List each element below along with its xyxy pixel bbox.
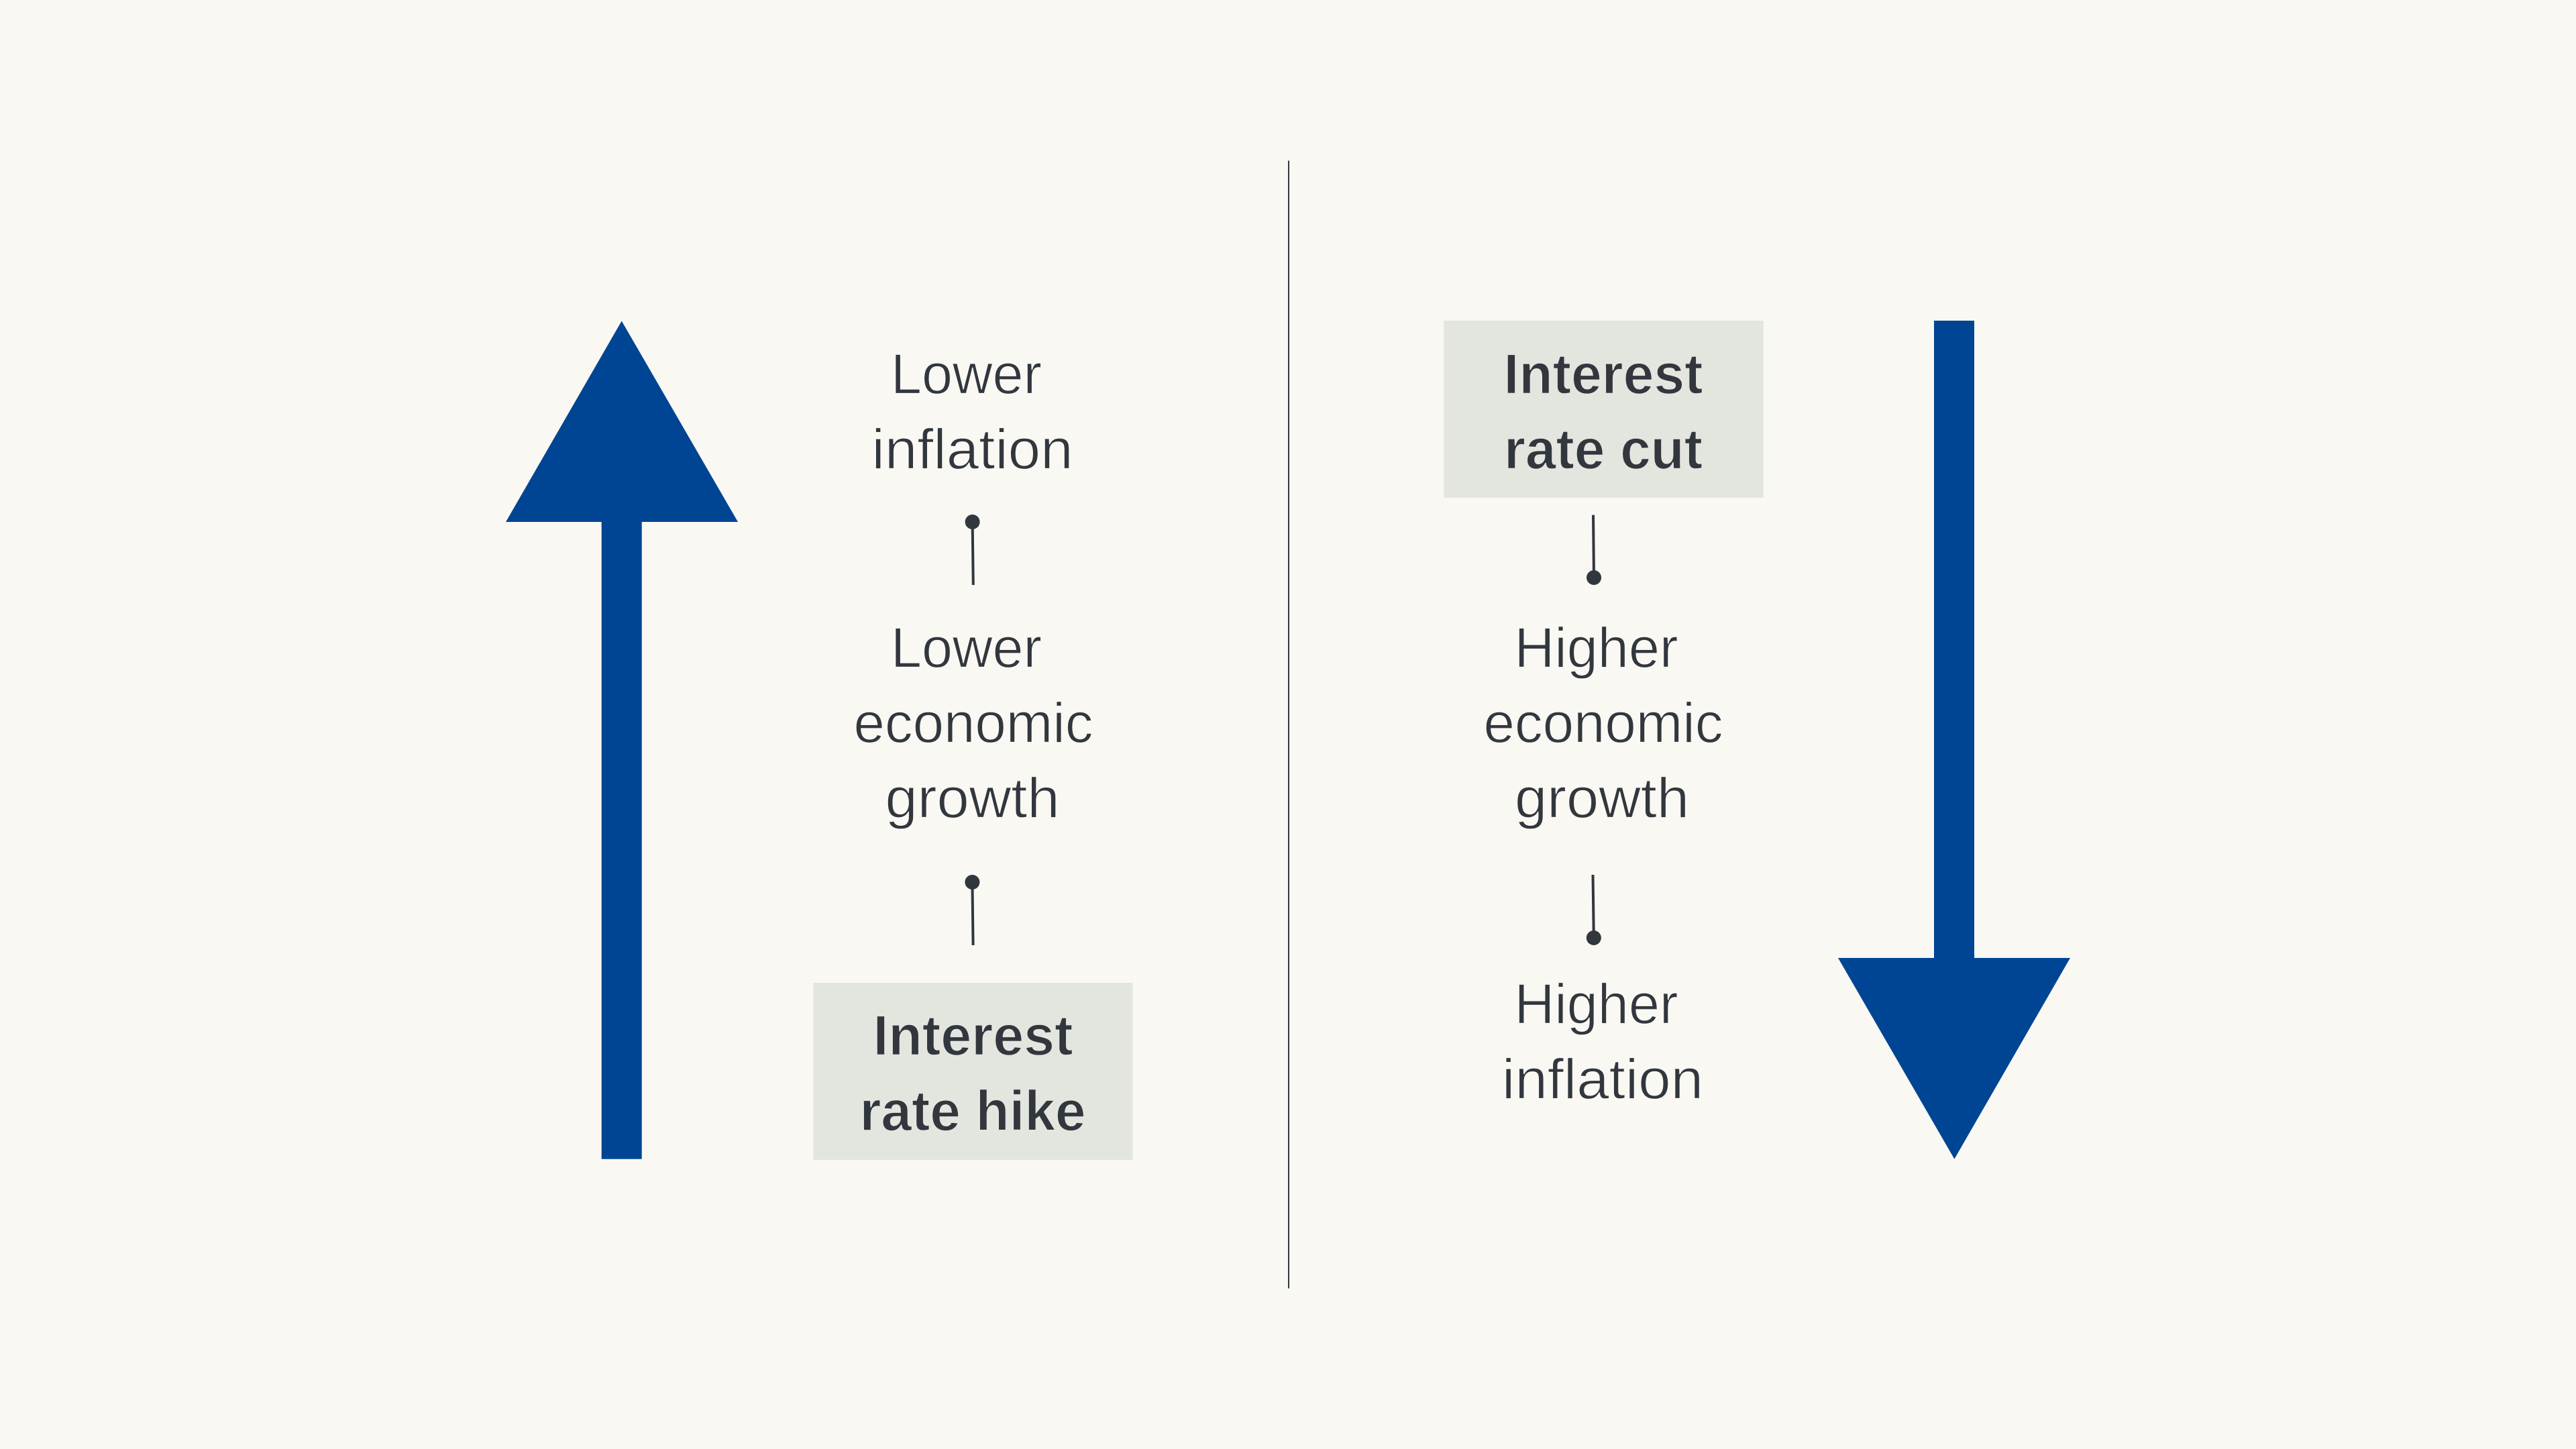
connector: growth to inflation — [965, 515, 980, 585]
text: lower economic growth: growth — [885, 766, 1060, 829]
text: lower economic growth: Lower — [891, 616, 1042, 679]
arrow: rates rising — [506, 321, 738, 1159]
text: higher inflation: inflation — [1502, 1047, 1703, 1110]
box: interest rate cut — [1444, 321, 1764, 498]
panel: interest rate cut — [1444, 321, 2070, 1159]
text: lower economic growth — [853, 616, 1093, 829]
text: higher economic growth — [1484, 616, 1723, 829]
box: interest rate hike — [813, 983, 1133, 1160]
box: interest rate cut: rate cut — [1504, 418, 1703, 481]
text: lower inflation: Lower — [891, 343, 1042, 406]
text: lower economic growth: economic — [853, 692, 1093, 755]
connector: hike to growth — [965, 875, 979, 945]
box: interest rate cut: Interest — [1504, 343, 1703, 406]
divider — [1288, 161, 1289, 1288]
text: higher economic growth: Higher — [1515, 616, 1678, 679]
text: higher economic growth: growth — [1515, 766, 1689, 829]
text: lower inflation: inflation — [872, 417, 1073, 480]
text: higher economic growth: economic — [1484, 692, 1723, 755]
text: lower inflation — [872, 343, 1073, 480]
box: interest rate hike: Interest — [873, 1004, 1073, 1067]
panel: interest rate hike — [506, 321, 1133, 1160]
text: higher inflation: Higher — [1515, 972, 1678, 1035]
arrow: rates falling — [1838, 321, 2070, 1159]
connector: cut to growth — [1587, 515, 1601, 585]
text: higher inflation — [1502, 972, 1703, 1110]
box: interest rate hike: rate hike — [860, 1079, 1085, 1142]
connector: growth to inflation — [1587, 875, 1601, 945]
